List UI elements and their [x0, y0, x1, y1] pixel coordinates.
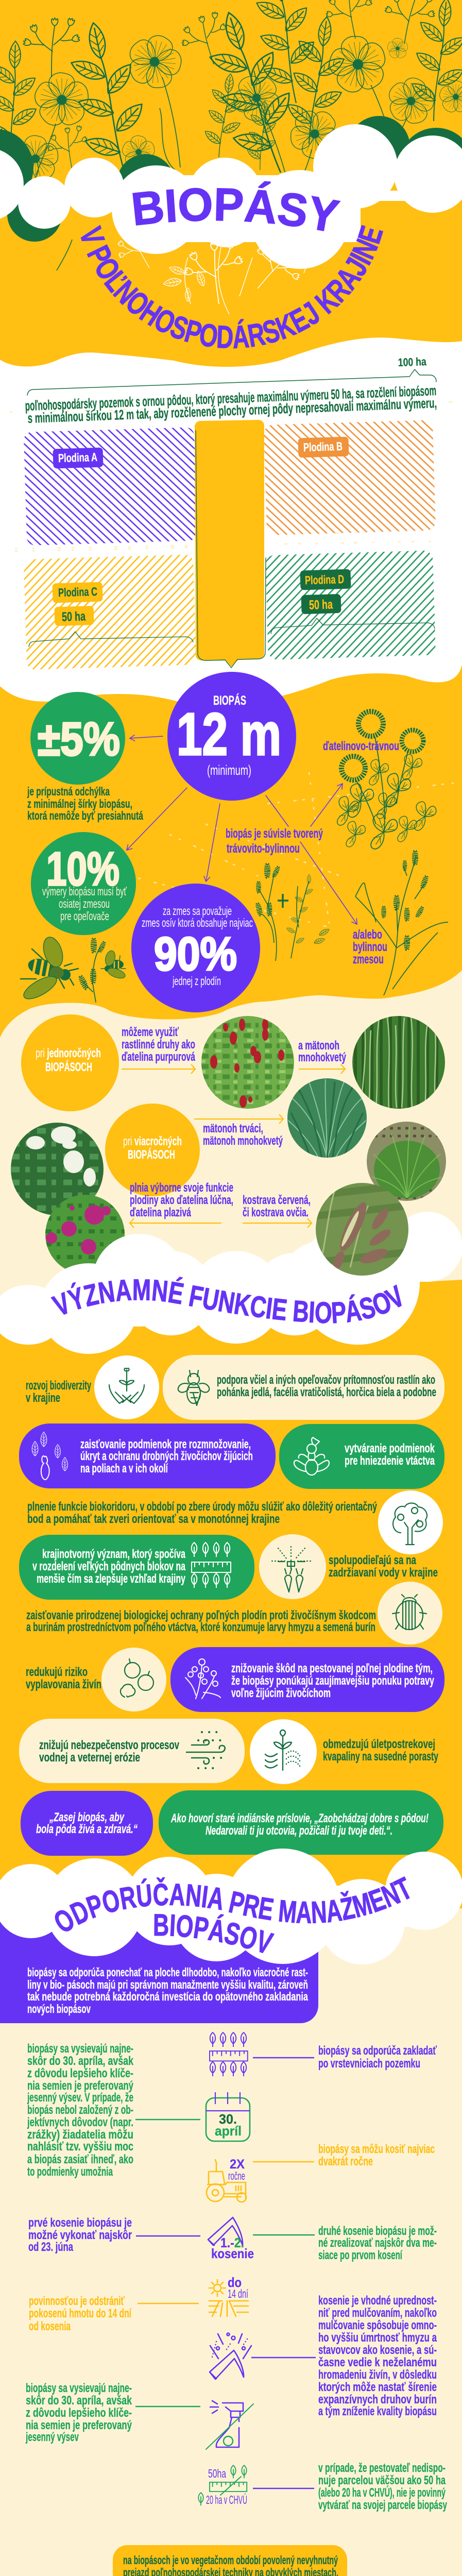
icon: beetle	[392, 1595, 426, 1630]
hatched field D	[265, 550, 436, 660]
function: reproduction shelter: úkryt a ochranu drobných živočíchov žijúcich	[80, 1449, 253, 1463]
icon: scythe with mowing count: 1.-2.	[220, 2235, 244, 2250]
function: biological protection	[26, 1582, 442, 1645]
connector line	[253, 2488, 314, 2489]
text: tolerance: je prípustná odchýlka	[27, 785, 110, 798]
text: fescues	[243, 1193, 311, 1219]
function: landscape	[19, 1535, 254, 1600]
label: herbal mix: a/alebo	[353, 927, 382, 942]
icon: area limit 50 ha: 20 ha v CHVÚ	[206, 2493, 247, 2506]
text: first mowing	[28, 2216, 132, 2254]
text: contours	[318, 2044, 437, 2071]
arrow left to clovers	[130, 1223, 221, 1224]
biopas 12 m circle: 12 m	[177, 701, 281, 768]
function: biocorridor: bod a pomáhať tak zveri orientovať sa v monotónnej krajine	[27, 1512, 280, 1526]
label: D 50 ha: 50 ha	[309, 597, 333, 613]
text: clovers: plnia výborne svoje funkcie	[130, 1181, 233, 1195]
connector line	[253, 2057, 314, 2058]
central biopas strip	[195, 420, 266, 668]
icon: calendar 30 april	[206, 2092, 250, 2141]
circle: 90 percent: zmes osív ktorá obsahuje najviac	[142, 916, 253, 929]
circle: 10 percent: 10%	[46, 843, 119, 895]
quote: sow biopas: „Zasej biopás, aby	[49, 1810, 125, 1824]
quote: indian proverb	[159, 1790, 443, 1855]
callout: machinery passage	[113, 2545, 347, 2576]
circle: perennial biopas: pri viacročných	[123, 1134, 182, 1148]
text: first mowing: prvé kosenie biopásu je	[28, 2216, 132, 2230]
illustration: clover	[337, 711, 436, 849]
connector line	[138, 2303, 199, 2304]
function: landscape: v rozdelení veľkých pôdnych blokov na	[32, 1560, 185, 1573]
label: Plodina A	[53, 448, 104, 468]
text: sowing date: skôr do 30. apríla, avšak	[27, 2054, 133, 2068]
icon: trees and ruler	[192, 1543, 231, 1588]
arrow right to fescue	[243, 1223, 312, 1224]
icon: hands and sprout	[109, 1368, 144, 1403]
text: mowing twice	[318, 2142, 435, 2168]
arrow to crimson clover	[122, 1069, 195, 1070]
photo: red clover	[45, 1195, 125, 1274]
icon: area limit 50 ha: 50ha	[208, 2467, 226, 2480]
label: Plodina B	[298, 437, 349, 457]
text: keep long term: tak nebude potrebná každoročná investícia do opätovného zakladania	[27, 1990, 308, 2003]
text: sowing date: to podmienky umožnia	[27, 2165, 113, 2179]
text: sowing date: jektívnych dôvodov (napr.	[27, 2115, 133, 2129]
function: water retention	[259, 1534, 438, 1599]
photo: crimson clover	[201, 1016, 295, 1109]
heading: management recommendations: ODPORÚČANIA PRE MANAŽMENT	[55, 1876, 410, 1931]
text: sowing date: nia semien je preferovaný	[27, 2079, 133, 2093]
text: sowing date: nahlásiť tzv. vyššiu moc	[27, 2140, 133, 2154]
text: autumn sowing: skôr do 30. apríla, avšak	[26, 2394, 132, 2408]
label: Plodina D	[300, 569, 351, 590]
text: autumn sowing	[25, 2381, 132, 2444]
icon: area limit 50 ha	[198, 2465, 247, 2506]
circle: annual biopas	[21, 1014, 119, 1111]
panel: purple intro background	[0, 1917, 318, 2023]
circle: 90 percent: jednej z plodín	[172, 974, 221, 988]
function: biocorridor	[27, 1490, 443, 1554]
text: perennial ryegrass: mätonoh mnohokvetý	[203, 1134, 283, 1148]
icon: sun and field 14 days: do	[228, 2275, 242, 2290]
quote: sow biopas	[21, 1791, 153, 1856]
text: italian ryegrass	[298, 1039, 346, 1064]
text: remove biomass: pokosenú hmotu do 14 dní	[29, 2307, 132, 2320]
decorative: dark green shapes behind the cloud	[0, 116, 462, 242]
quote: sow biopas: bola pôda živá a zdravá.“	[36, 1822, 138, 1836]
text: italian ryegrass: mnohokvetý	[298, 1050, 346, 1064]
text: annual species: ďatelina purpurová	[122, 1050, 195, 1064]
photo: fescue tuft	[367, 1122, 446, 1201]
function: nutrient leaching: vyplavovania živín	[26, 1677, 101, 1691]
text: clovers: plodiny ako ďatelina lúčna,	[130, 1193, 233, 1207]
icon: vegetables	[121, 1659, 153, 1697]
cream lower section background	[0, 1922, 462, 2576]
text: sowing date: biopás nebol založený z ob-	[27, 2103, 133, 2117]
decorative specks	[10, 402, 453, 608]
connector line	[135, 2119, 200, 2120]
circle: 10 percent: osiatej zmesou	[59, 897, 110, 910]
function: damage reduction	[170, 1647, 444, 1712]
connector line	[135, 2406, 200, 2407]
text: second mowing	[318, 2224, 437, 2262]
icon: tractor 2x: 2X	[230, 2157, 245, 2172]
icon: wheat and rabbit	[32, 1432, 67, 1480]
hatched field C	[24, 554, 196, 670]
icon: plant and drift	[265, 1730, 300, 1770]
title cloud	[0, 124, 462, 269]
text: remove biomass: od kosenia	[29, 2319, 71, 2333]
function: damage reduction: voľne žijúcim živočíchom	[231, 1686, 331, 1700]
photo: perennial ryegrass	[287, 1078, 367, 1159]
function: erosion: vodnej a veternej erózie	[39, 1751, 140, 1765]
white wave background for field diagram	[0, 337, 462, 703]
text: sowing date: biopásy sa vysievajú najne-	[27, 2042, 133, 2056]
photo: tall grass	[352, 1016, 446, 1109]
connector line	[253, 2234, 315, 2235]
label: D 50 ha	[301, 594, 341, 614]
function: bird nesting	[279, 1424, 444, 1489]
function: erosion: znižujú nebezpečenstvo procesov	[39, 1738, 179, 1752]
biopas 12 m circle: (minimum)	[207, 762, 251, 778]
label: clover-grass: ďatelinovo-trávnou	[323, 739, 399, 753]
icon: tractor 2x	[207, 2157, 246, 2202]
icon: sprinkler and carrots	[272, 1547, 312, 1592]
text: keep long term: biopásy sa odporúča ponechať na ploche dlhodobo, nakoľko viacročné rast-	[27, 1965, 308, 1979]
function: reproduction shelter	[19, 1423, 276, 1488]
text: clovers: ďatelina plazivá	[130, 1206, 191, 1219]
function: pollinators	[163, 1355, 444, 1420]
text: annual species: rastlinné druhy ako	[122, 1038, 195, 1052]
arrow to 5 percent	[130, 736, 163, 738]
circle: plus minus 5 percent: ±5%	[38, 713, 120, 766]
connector line	[251, 2357, 316, 2358]
title: BIOPÁSY	[132, 181, 341, 231]
label: Plodina A: Plodina A	[58, 450, 97, 465]
functions heading cloud	[0, 1212, 462, 1354]
function: biodiversity: v krajine	[26, 1391, 60, 1405]
photo: fescue seed head	[316, 1183, 409, 1276]
text: keep long term: nových biopásov	[27, 2002, 91, 2015]
text: biopas formed: trávovito-bylinnou	[227, 841, 300, 856]
top brace: 100 ha	[27, 355, 436, 395]
function: nutrient leaching	[26, 1648, 166, 1711]
label: herbal mix: zmesou	[353, 952, 384, 967]
illustration: herbs with plus	[256, 864, 330, 961]
label: herbal mix	[353, 927, 387, 967]
function: biodiversity: rozvoj biodiverzity	[26, 1379, 91, 1393]
circle: annual biopas: BIOPÁSOCH	[45, 1060, 92, 1074]
text: tolerance: ktorá nemôže byť presiahnutá	[27, 809, 143, 822]
circle: perennial biopas	[105, 1104, 200, 1196]
text: sowing date: z dôvodu lepšieho klíče-	[27, 2066, 133, 2080]
text: sowing date: jesenný výsev. V prípade, že	[27, 2091, 133, 2105]
function: nutrient leaching: redukujú riziko	[26, 1665, 88, 1679]
icon: wild plant	[185, 1659, 220, 1699]
text: remove biomass: povinnosťou je odstrániť	[29, 2294, 125, 2308]
brace D	[271, 618, 435, 634]
function: landscape: menšie čím sa zlepšuje vzhľad krajiny	[37, 1572, 185, 1586]
label: Plodina C: Plodina C	[58, 585, 97, 599]
icon: sun and field 14 days: 14 dní	[228, 2287, 248, 2300]
text: autumn sowing: nia semien je preferovaný	[26, 2418, 132, 2432]
circle: 90 percent	[131, 884, 260, 1012]
label: Plodina D: Plodina D	[305, 572, 344, 587]
illustration: white flowers under title cloud	[110, 220, 338, 314]
icon: crossed spray bottle	[206, 2401, 253, 2449]
text: mowing versus mulching	[318, 2294, 437, 2418]
circle: 90 percent: za zmes sa považuje	[163, 904, 232, 918]
hatched field A	[24, 427, 197, 546]
connector line	[136, 2235, 200, 2236]
text: biopas formed: biopás je súvisle tvorený	[226, 826, 323, 841]
label: Plodina C	[52, 582, 103, 603]
subtitle: V POĽNOHOSPODÁRSKEJ KRAJINE	[80, 225, 383, 348]
label: Plodina B: Plodina B	[303, 439, 343, 454]
cream section background	[0, 970, 462, 1309]
text: tolerance	[27, 785, 143, 822]
icon: scythe with mowing count	[208, 2217, 254, 2261]
label: C 50 ha: 50 ha	[62, 609, 86, 624]
icon: wind	[186, 1732, 227, 1768]
label: C 50 ha	[54, 606, 94, 626]
text: keep long term: liny v bio- pásoch majú pri správnom manažmente vyššiu kvalitu, zároveň	[27, 1978, 308, 1991]
illustration: top meadow flowers	[0, 0, 462, 270]
icon: tree	[393, 1503, 427, 1545]
top brace: 100 ha: 100 ha	[398, 355, 427, 369]
icon: tractor 2x: ročne	[228, 2170, 245, 2182]
circle: annual biopas: pri jednoročných	[36, 1046, 101, 1060]
arrow to ryegrass	[299, 1069, 345, 1070]
label: herbal mix: bylinnou	[353, 940, 387, 954]
function: water retention: spolupodieľajú sa na	[329, 1553, 416, 1567]
function: erosion	[19, 1719, 245, 1783]
icon: contour trees and ruler	[210, 2032, 248, 2076]
text: sowing date	[27, 2042, 133, 2179]
icon: calendar 30 april: 30.	[219, 2111, 237, 2127]
circle: plus minus 5 percent	[30, 692, 125, 785]
heading: important functions: VÝZNAMNÉ FUNKCIE BIOPÁSOV	[50, 1277, 402, 1324]
text: italian ryegrass: a mätonoh	[298, 1039, 339, 1053]
text: autumn sowing: biopásy sa vysievajú najne-	[26, 2381, 132, 2395]
illustration: herbal plant	[355, 851, 448, 995]
text: annual species	[122, 1025, 195, 1064]
arrows from 12 m to mixes	[206, 784, 357, 924]
callout: machinery passage: na biopásoch je vo vegetačnom období povolený nevyhnutný	[123, 2553, 338, 2567]
text: autumn sowing: z dôvodu lepšieho klíče-	[26, 2406, 132, 2420]
text: autumn sowing: jesenný výsev	[25, 2430, 79, 2444]
function: landscape: krajinotvorný význam, ktorý spočíva	[42, 1547, 185, 1561]
function: reproduction shelter: na poliach a v ich okolí	[80, 1462, 168, 1476]
text: first mowing: možné vykonať najskôr	[28, 2228, 132, 2242]
icon: turkey	[294, 1437, 329, 1475]
decorative specks on yellow	[129, 773, 453, 927]
arrow to grass	[195, 1118, 283, 1120]
biopas 12 m circle	[167, 672, 296, 801]
text: fescues: kostrava červená,	[243, 1193, 311, 1207]
function: biodiversity	[26, 1355, 159, 1419]
circle: 90 percent: 90%	[154, 928, 237, 980]
hatched field B	[264, 420, 436, 535]
function: spray drift	[250, 1719, 438, 1784]
text: sowing date: a biopás zasiať ihneď, ako	[27, 2153, 133, 2166]
icon: sun and field 14 days	[209, 2275, 248, 2316]
connector line	[253, 2161, 314, 2162]
circle: 10 percent: výmery biopásu musí byť	[42, 885, 127, 898]
heading: management recommendations: BIOPÁSOV	[154, 1914, 275, 1953]
text: sowing date: zrážky) žiadatelia môžu	[27, 2128, 133, 2142]
icon: bee	[178, 1370, 209, 1405]
function: reproduction shelter: zaisťovanie podmienok pre rozmnožovanie,	[80, 1437, 251, 1451]
text: remove biomass	[29, 2294, 132, 2333]
circle: perennial biopas: BIOPÁSOCH	[128, 1147, 175, 1162]
text: mowing twice: dvakrát ročne	[318, 2155, 373, 2168]
brace C	[29, 632, 193, 647]
text: biopas formed	[226, 826, 323, 856]
text: exemption	[318, 2461, 447, 2512]
photo: white clover	[11, 1123, 104, 1215]
text: perennial ryegrass	[203, 1122, 283, 1148]
icon: scythe with mowing count: kosenie	[211, 2246, 254, 2261]
text: fescues: či kostrava ovčia.	[243, 1206, 309, 1219]
circle: 10 percent	[31, 832, 136, 935]
arrow to 10 percent	[127, 788, 187, 850]
text: clovers	[130, 1181, 233, 1219]
biopas 12 m circle: BIOPÁS	[213, 693, 246, 708]
circle: 10 percent: pre opeľovače	[60, 909, 109, 923]
text: tolerance: z minimálnej šírky biopásu,	[27, 797, 132, 810]
illustration: bees and plant	[21, 935, 127, 1003]
text: second mowing: siace po prvom kosení	[318, 2248, 403, 2262]
icon: scythe with insects	[210, 2333, 251, 2379]
text: annual species: môžeme využiť	[122, 1025, 179, 1039]
icon: calendar 30 april: apríl	[215, 2123, 242, 2139]
management heading cloud	[0, 1849, 462, 1964]
text: keep long term	[27, 1965, 308, 2015]
text: perennial ryegrass: mätonoh trváci,	[203, 1122, 263, 1136]
text: first mowing: od 23. júna	[28, 2240, 73, 2254]
